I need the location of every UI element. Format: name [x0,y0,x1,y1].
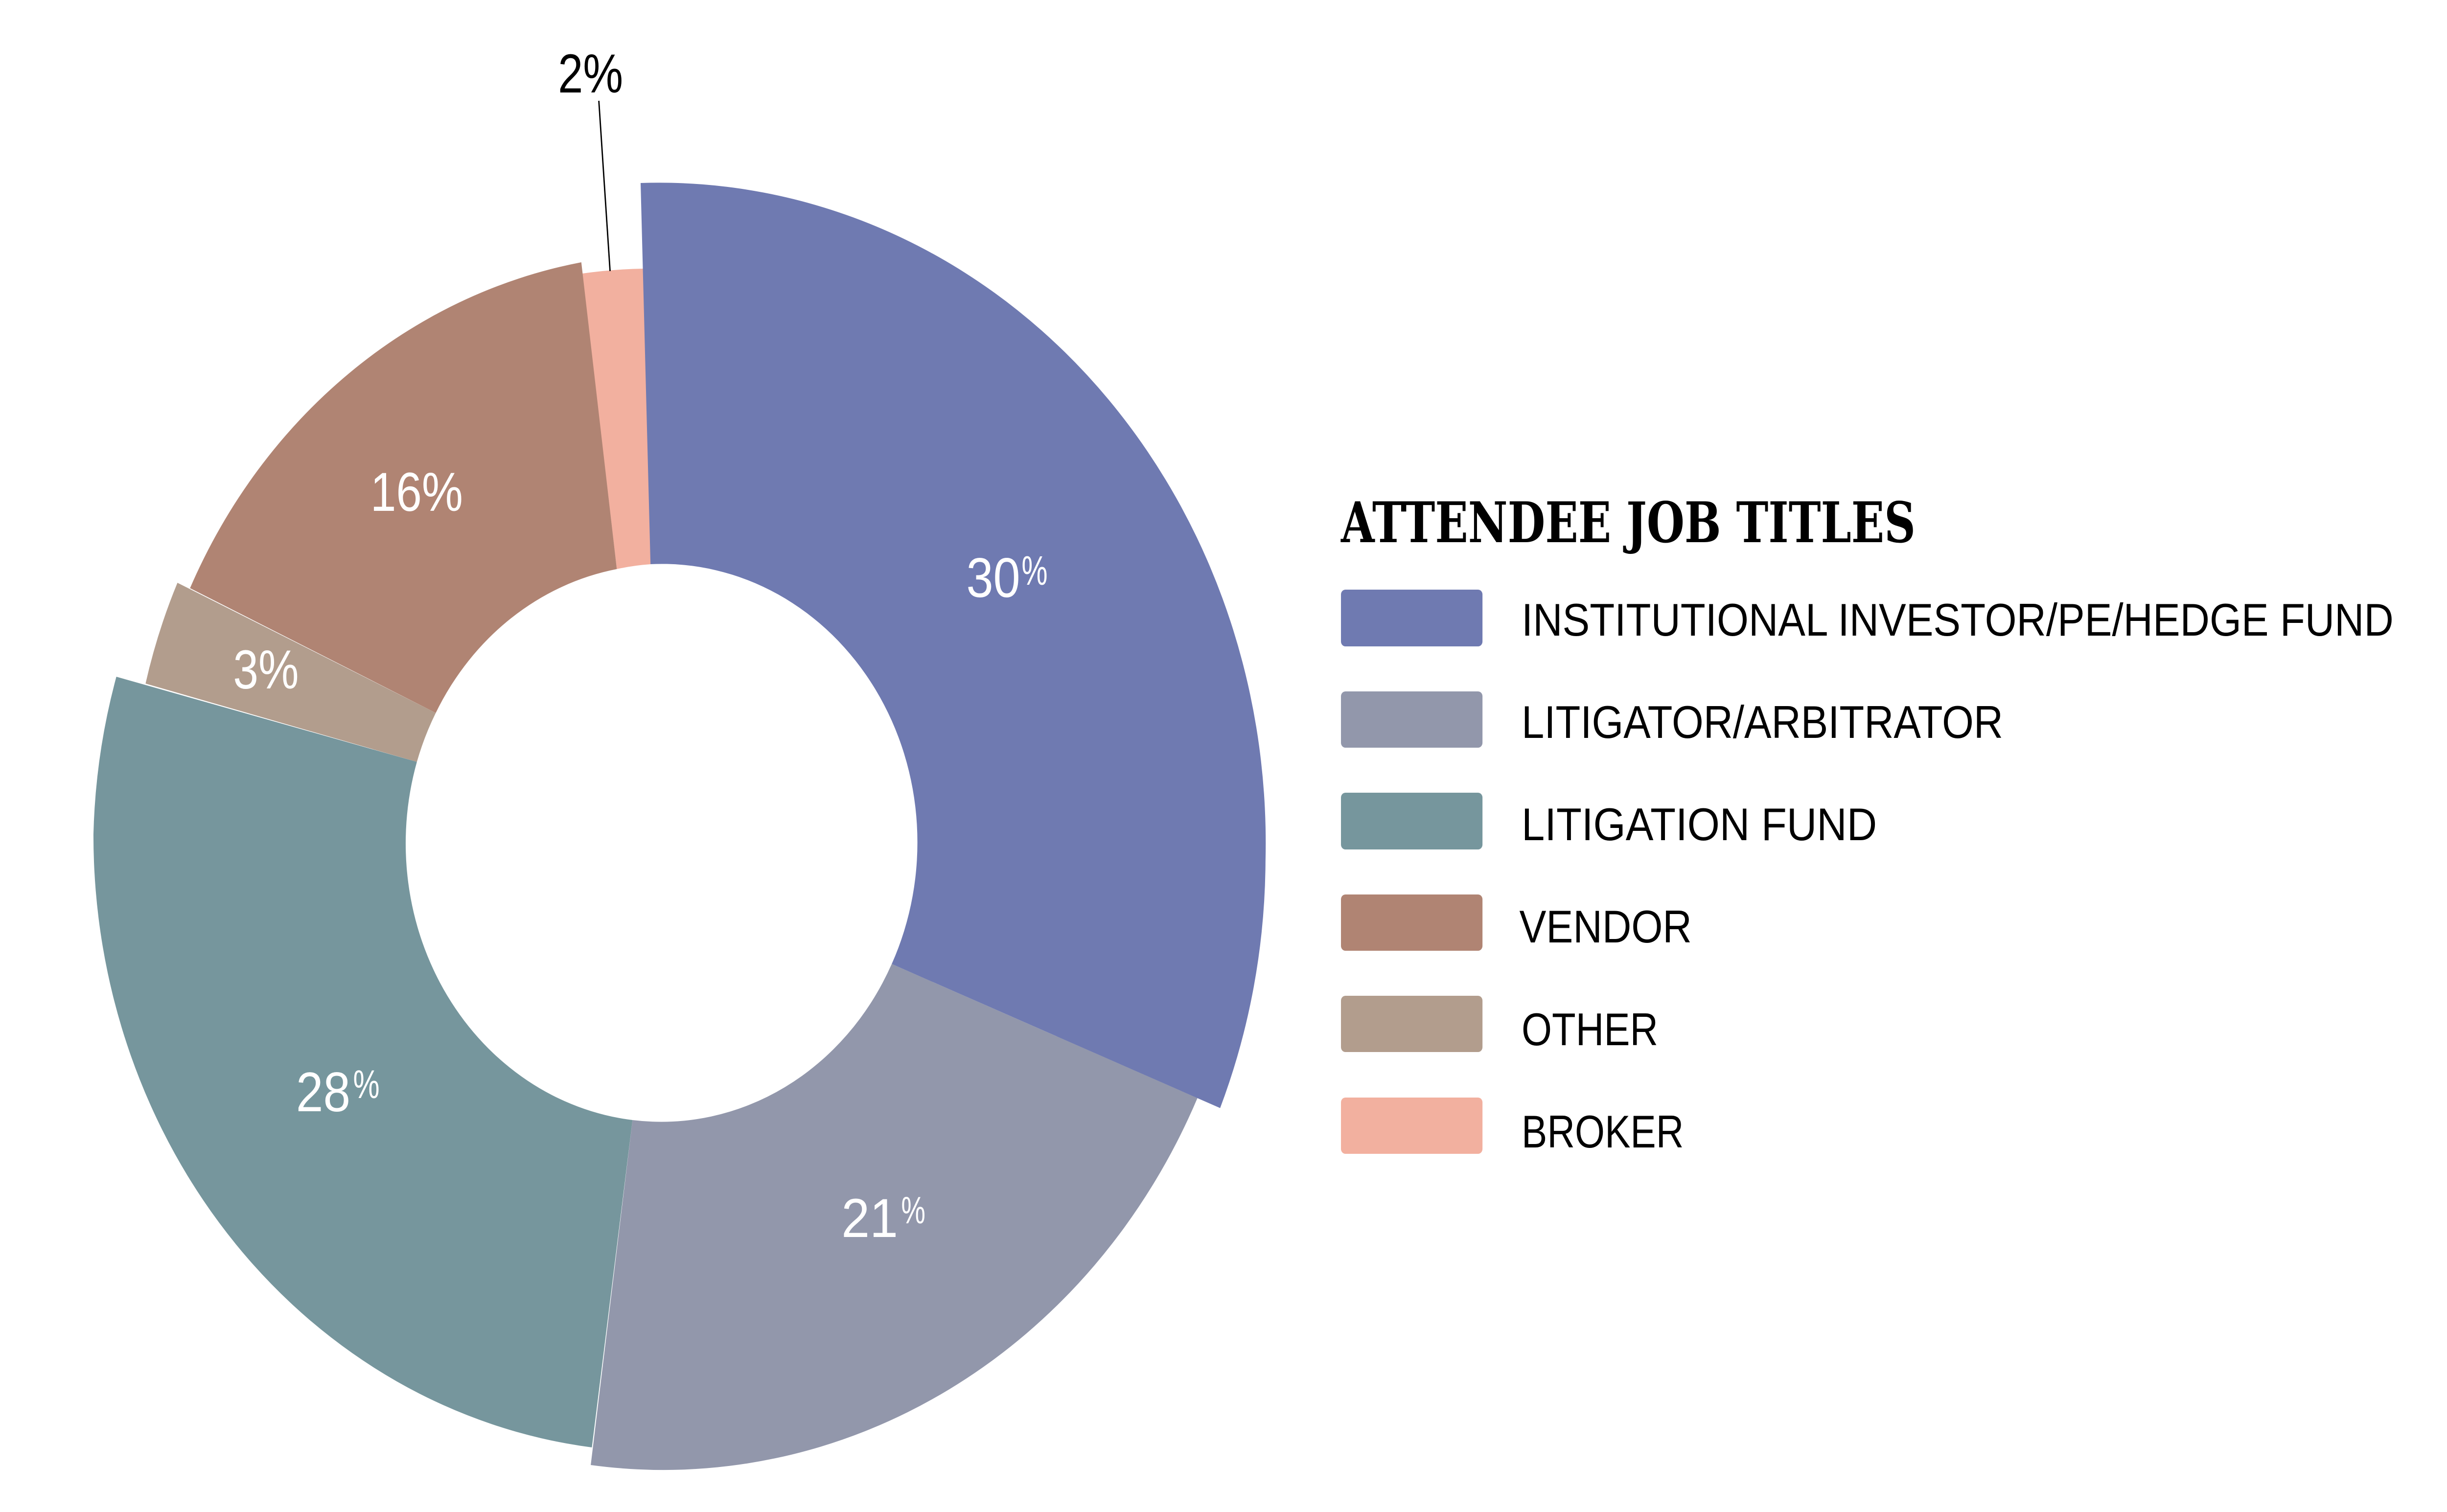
legend item: other [1341,996,1658,1055]
value label: 21% [841,1188,925,1249]
legend item: litigator/arbitrator: LITIGATOR/ARBITRATOR [1522,697,2003,748]
value label: 28%: 28 [296,1061,350,1123]
legend item: broker [1341,1098,1684,1158]
leader line for 2% [599,101,610,271]
value label: 21%: 21 [841,1188,898,1249]
value label: 28% [296,1061,380,1123]
legend item: institutional investor: INSTITUTIONAL INVESTOR/PE/HEDGE FUND [1522,595,2394,646]
value label: 3%: 3% [233,639,299,700]
donut chart [93,43,1266,1470]
legend item: litigation fund [1341,793,1877,850]
value label: 2%: 2% [558,43,623,104]
legend item: litigation fund: LITIGATION FUND [1522,799,1877,850]
legend item: vendor: VENDOR [1519,901,1692,953]
legend item: litigator/arbitrator [1341,691,2003,748]
segment: institutional investor 30% [641,183,1266,1108]
legend item: broker: BROKER [1522,1106,1684,1158]
value label: 21%: % [901,1189,925,1232]
legend title: ATTENDEE JOB TITLES [1340,490,1916,555]
segment: other 3% [145,583,436,762]
value label: 28%: % [353,1062,380,1107]
segment: litigation fund 28% [93,677,632,1447]
legend item: other: OTHER [1522,1004,1658,1055]
segment: vendor 16% [190,262,617,713]
legend item: vendor [1341,894,1692,953]
legend [1340,490,2394,1158]
value label: 30%: % [1021,548,1048,594]
segment: broker 2% [582,269,651,569]
value label: 16%: 16% [370,461,463,523]
segment: litigator/arbitrator 21% [591,964,1198,1470]
value label: 30%: 30 [966,547,1020,609]
